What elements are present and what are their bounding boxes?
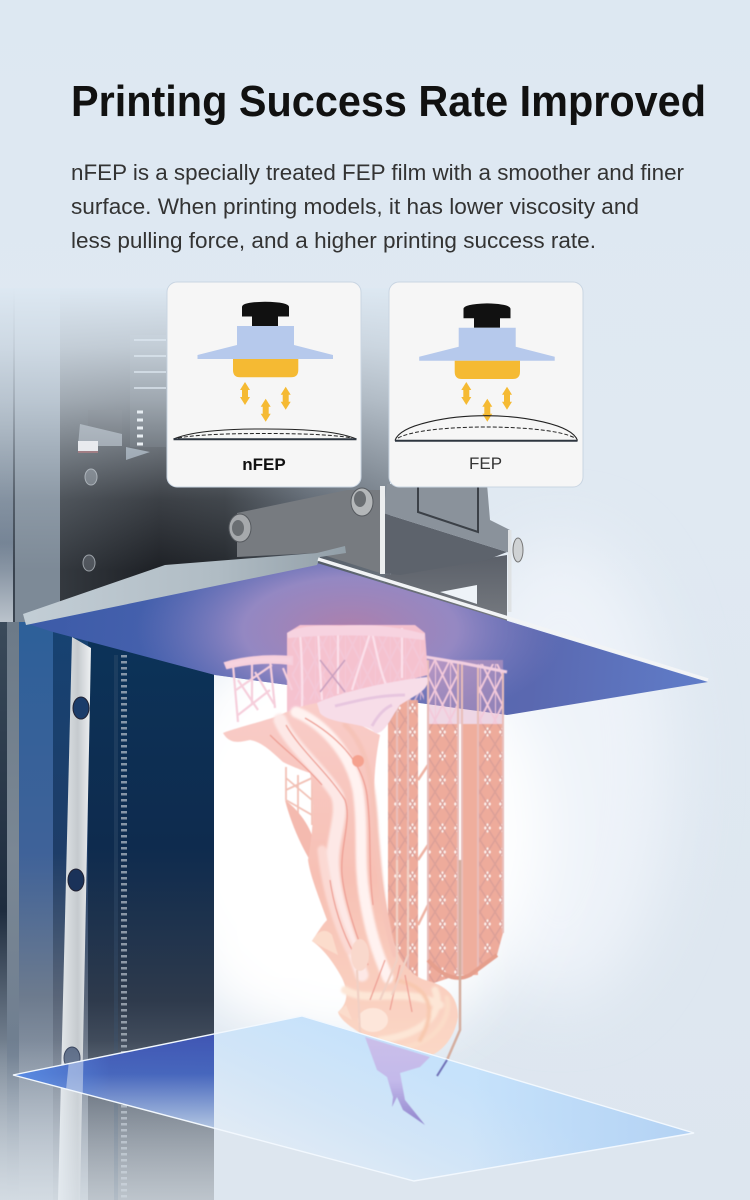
description text: less pulling force, and a higher printing success rate. [71,228,596,253]
frame screws [83,469,97,571]
thin vertical support [447,860,460,1060]
rail bolts [64,697,89,1069]
icon: resin block [455,361,520,379]
left lattice block [225,656,292,722]
icon: knob [242,302,289,326]
icon: knob [464,303,510,328]
support rods [357,860,408,1033]
icon: build plate [419,328,555,361]
description text: nFEP is a specially treated FEP film with a smoother and finer [71,160,684,185]
printer frame column [0,288,390,1200]
small nub [352,755,364,767]
plate bright edge [318,559,708,680]
top lump [317,677,428,733]
upper sheet [383,484,510,553]
white gap [440,585,477,604]
plate pink reflection [152,563,540,706]
title: Printing Success Rate Improved [71,77,706,126]
cut window [418,484,478,532]
lower blue side column [0,622,7,1200]
arrows [461,382,512,422]
background light glow [155,540,670,1040]
build plate [23,546,708,715]
icon: resin block [233,359,298,377]
card: nFEP [167,282,361,487]
silver bars [380,486,385,574]
bottom fade over the machine [0,1040,214,1200]
label: FEP: FEP [469,454,502,473]
lower face [385,555,507,622]
description text [71,160,684,253]
bracket screws [229,488,523,562]
film curve [395,416,578,441]
description text: surface. When printing models, it has lower viscosity and [71,194,639,219]
icon: build plate [198,326,333,359]
front plate [237,490,380,573]
motor window bracket [78,410,122,453]
plate top lip [23,546,346,625]
rack teeth [121,655,127,1200]
silver rail [58,637,91,1200]
lead screw rack [126,335,166,460]
glass resin vat surface [0,1010,694,1181]
z-axis bracket [229,484,523,622]
upper lattice block [287,625,428,712]
fine dark streak lines [270,718,412,1012]
lower left supports [285,767,324,880]
right lattice columns [388,657,507,990]
glass over column [16,1034,214,1128]
top fade over the machine [0,288,400,572]
lower lumps [312,931,388,1032]
film curve [174,429,356,439]
flowing streaks [280,712,448,1048]
card: FEP [389,282,583,487]
label: nFEP: nFEP [242,455,286,474]
arrows [240,382,291,422]
model body [223,703,458,1056]
submerged model tip [365,1037,447,1125]
navy inner column [88,630,214,1200]
printed model [223,625,507,1060]
plate underside [25,563,708,715]
